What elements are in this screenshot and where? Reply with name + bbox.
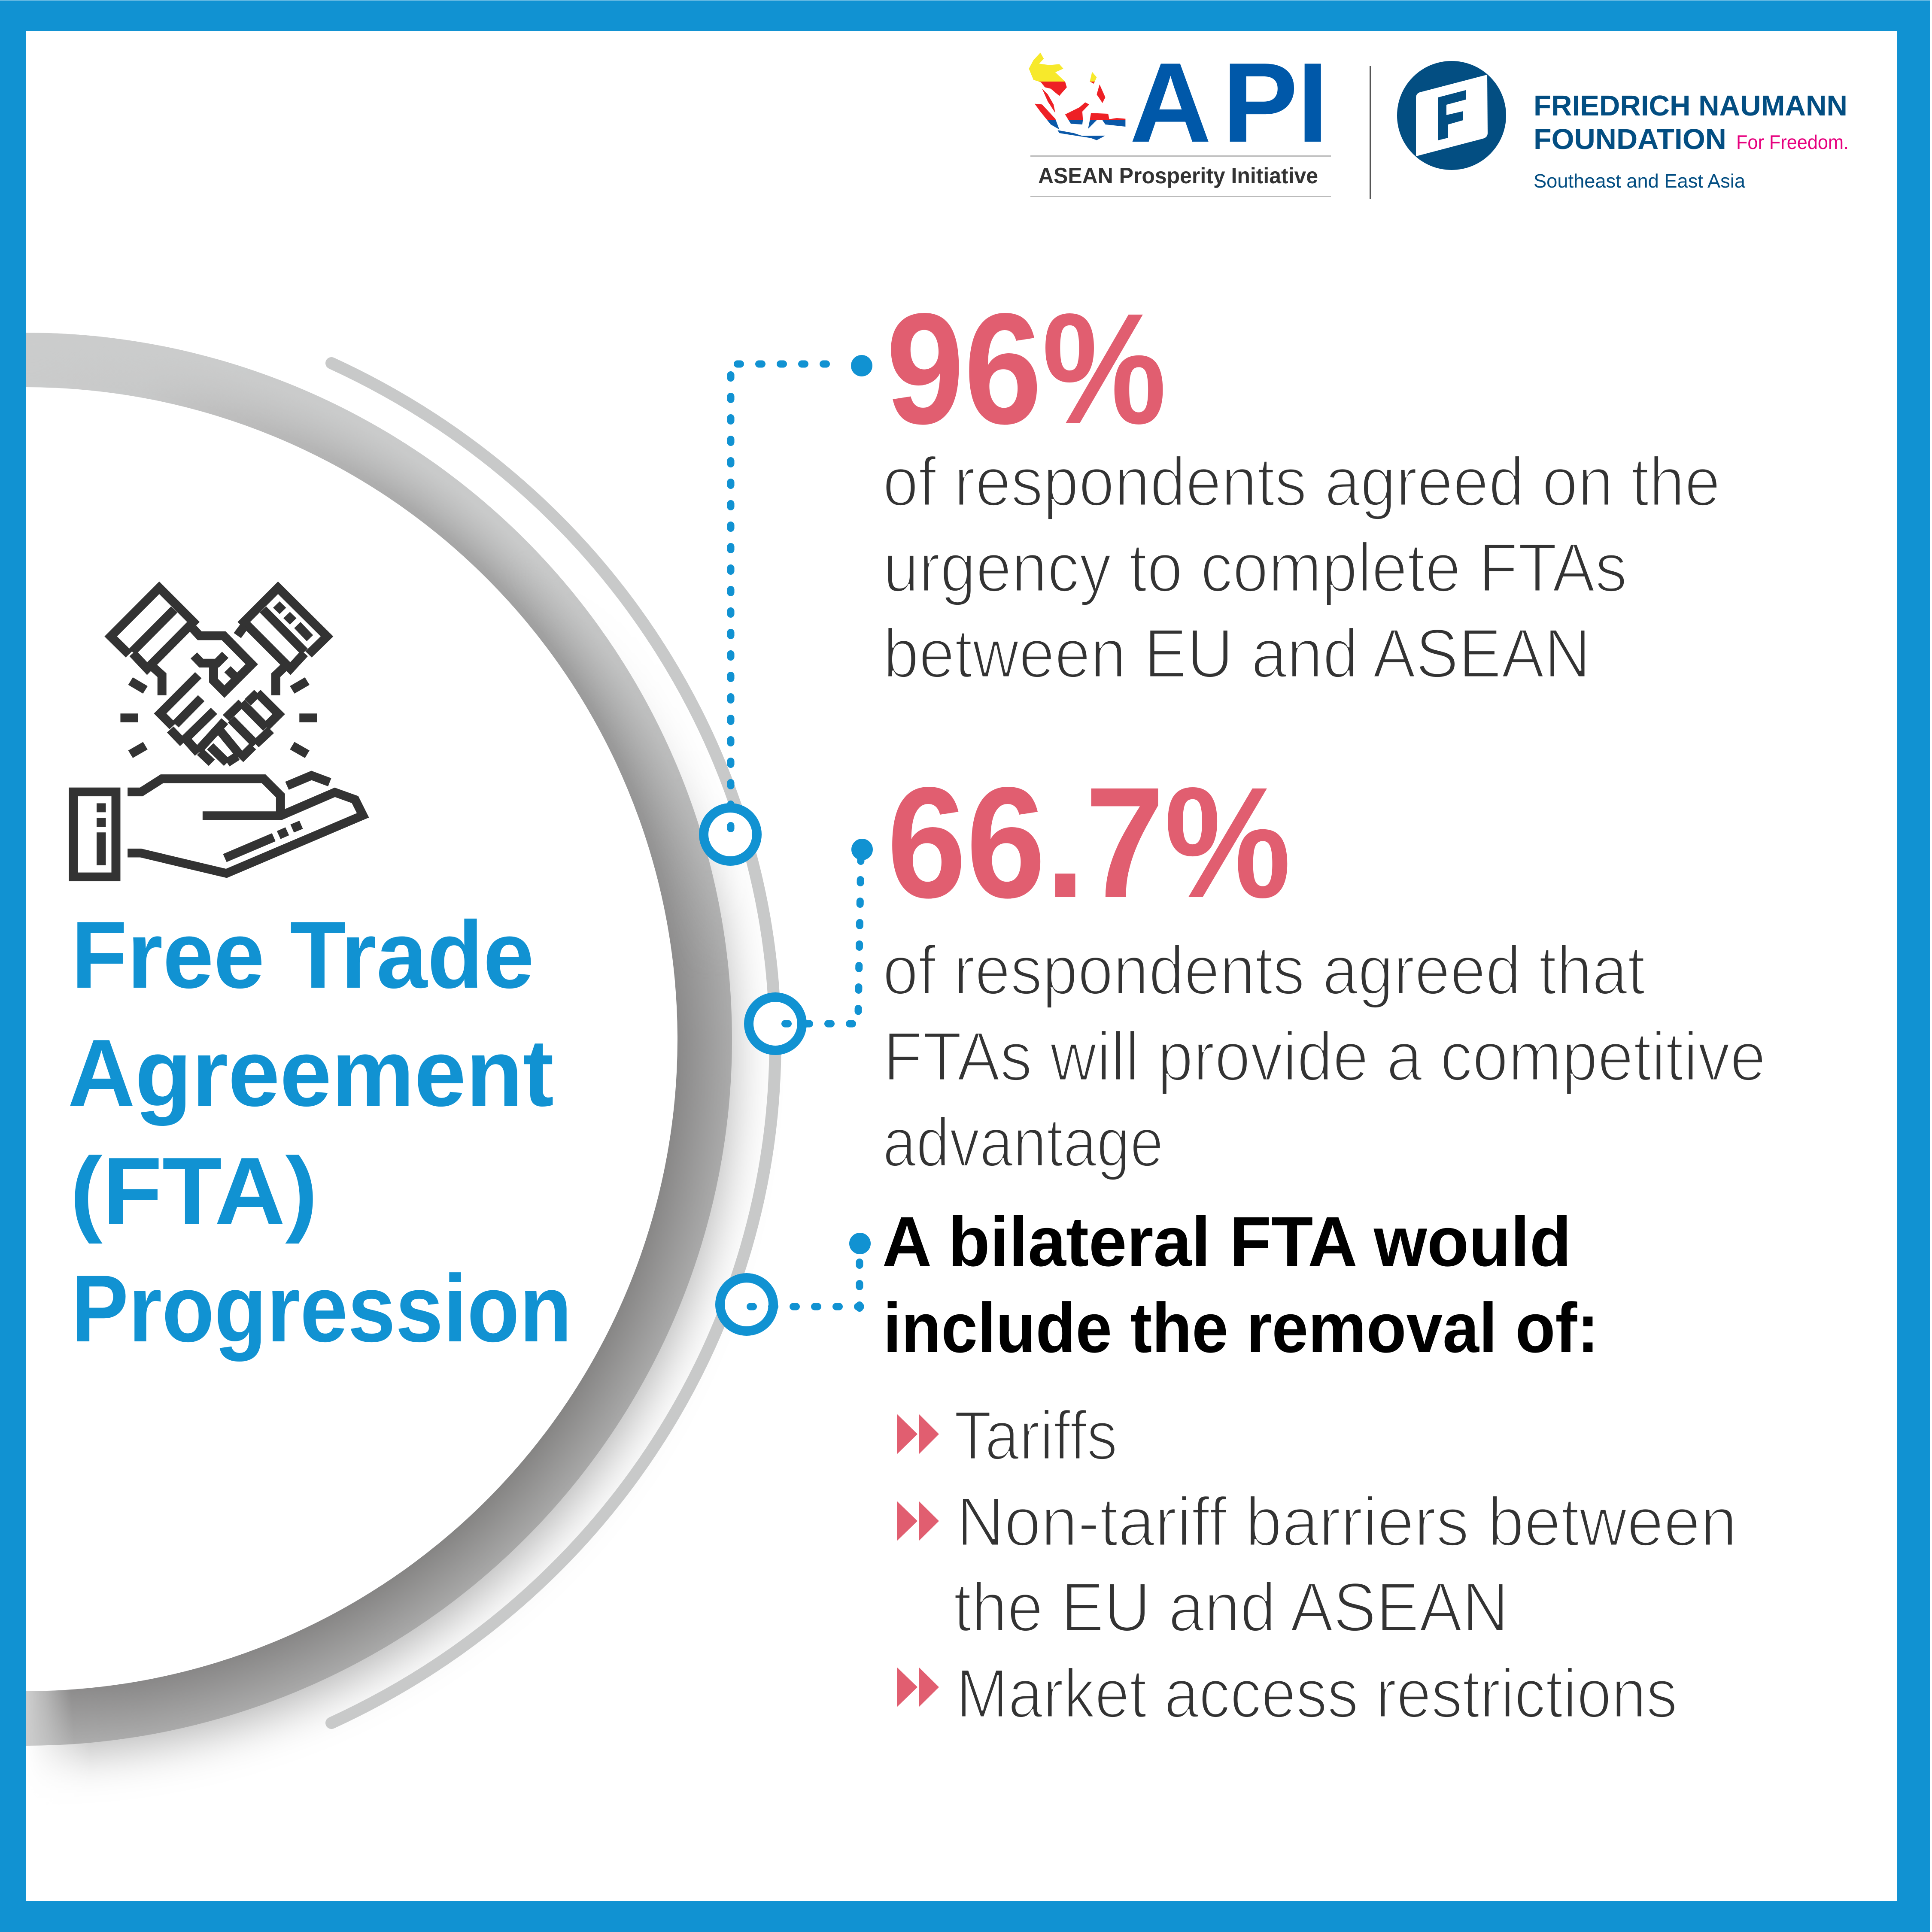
list item: tariffs: Tariffs — [954, 1397, 1118, 1474]
text: 66.7% description: of respondents agreed that — [883, 931, 1645, 1009]
logo: ASEAN Prosperity Initiative — [1029, 39, 1331, 197]
thin outer arc — [331, 363, 775, 1723]
stat: 96%: 96% — [886, 280, 1166, 457]
grey gradient ring — [0, 333, 732, 1746]
connector: 66.7% callout — [749, 839, 873, 1050]
logo: Friedrich Naumann Foundation: FOUNDATION — [1534, 123, 1726, 155]
list item: non-tariff barriers: the EU and ASEAN — [954, 1568, 1509, 1646]
icon: Southeast Asia map — [1029, 53, 1125, 140]
list item: non-tariff barriers: Non-tariff barriers between — [957, 1483, 1737, 1561]
list: removal items — [897, 1397, 1737, 1732]
FNF slogan: For Freedom. — [1736, 131, 1849, 153]
icon: double arrow — [897, 1414, 939, 1454]
subheading: bilateral FTA: include the removal of: — [883, 1289, 1599, 1367]
title: Agreement — [68, 1020, 554, 1126]
subheading: bilateral FTA — [882, 1202, 1599, 1367]
title: Progression — [71, 1256, 572, 1362]
text: 96% description: of respondents agreed on the — [883, 443, 1720, 521]
icon: FNF roundel — [1397, 61, 1506, 170]
list item: non-tariff barriers — [954, 1483, 1737, 1646]
connector: bilateral FTA callout — [720, 1233, 871, 1331]
logo: Friedrich Naumann Foundation — [1397, 61, 1849, 192]
FNF name: FRIEDRICH NAUMANN — [1534, 90, 1847, 122]
icon: double arrow — [897, 1501, 939, 1541]
connector: 96% callout — [704, 355, 872, 861]
text: 66.7% description: advantage — [883, 1104, 1163, 1181]
title: (FTA) — [70, 1138, 318, 1244]
title — [68, 902, 572, 1362]
text: 66.7% description — [883, 931, 1766, 1181]
API wordmark: API — [1130, 39, 1328, 166]
icon: double arrow — [897, 1667, 939, 1707]
API tagline: ASEAN Prosperity Initiative — [1038, 164, 1318, 188]
text: 96% description: between EU and ASEAN — [883, 615, 1591, 692]
FNF region: Southeast and East Asia — [1534, 170, 1746, 192]
white inner circle — [0, 387, 677, 1691]
ring shadow — [38, 718, 759, 1779]
icon: handshake over open hand — [73, 588, 363, 877]
title: Free Trade — [71, 902, 534, 1008]
ring upper highlight — [243, 375, 699, 844]
stat: 66.7%: 66.7% — [887, 754, 1291, 931]
text: 66.7% description: FTAs will provide a competitive — [883, 1018, 1766, 1095]
subheading: bilateral FTA: A bilateral FTA would — [882, 1202, 1571, 1281]
list item: market access: Market access restrictions — [956, 1655, 1677, 1732]
text: 96% description: urgency to complete FTAs — [883, 529, 1627, 607]
text: 96% description — [883, 443, 1720, 692]
